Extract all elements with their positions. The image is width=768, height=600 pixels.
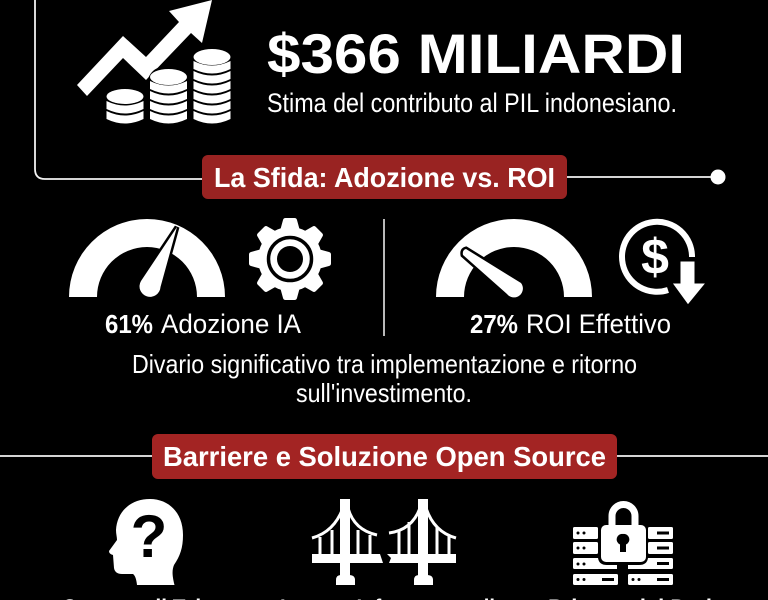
label: 61% adozione: 61% bbox=[105, 309, 153, 339]
icon: rising arrow over coin stacks bbox=[77, 0, 230, 126]
icon: gear bbox=[249, 218, 331, 300]
icon: broken bridge bbox=[312, 499, 456, 585]
divider bbox=[383, 219, 385, 336]
heading: barriere bbox=[0, 434, 768, 479]
icon: head with question mark: ? bbox=[131, 503, 167, 570]
icon: head with question mark bbox=[109, 499, 183, 585]
gauge: roi 27% bbox=[436, 219, 592, 297]
label: 27% roi: 27% bbox=[470, 309, 518, 339]
gauge: adoption 61% bbox=[69, 219, 225, 297]
barrier labels cut off at bottom edge bbox=[62, 595, 712, 600]
heading: barriere: Barriere e Soluzione Open Source bbox=[163, 441, 606, 472]
icon: dollar with down arrow bbox=[622, 222, 706, 305]
heading: la sfida bbox=[202, 155, 567, 199]
heading: la sfida: La Sfida: Adozione vs. ROI bbox=[214, 162, 555, 193]
connector with end dot bbox=[565, 170, 726, 184]
subtitle: Stima del contributo al PIL indonesiano. bbox=[267, 88, 677, 118]
label: 61% adozione bbox=[105, 309, 301, 339]
icon: lock over data servers bbox=[573, 505, 673, 585]
label: 61% adozione: Adozione IA bbox=[161, 309, 301, 339]
icon: dollar with down arrow: $ bbox=[641, 229, 669, 285]
text: gap description: Divario significativo tra implementazione e ritorno bbox=[132, 349, 637, 379]
frame line: top section connector bbox=[35, 0, 204, 179]
label: 27% roi bbox=[470, 309, 671, 339]
title: $366 miliardi: $366 MILIARDI bbox=[267, 22, 685, 85]
text: gap description bbox=[132, 349, 637, 408]
label: 27% roi: ROI Effettivo bbox=[526, 309, 671, 339]
text: gap description: sull'investimento. bbox=[296, 378, 472, 408]
